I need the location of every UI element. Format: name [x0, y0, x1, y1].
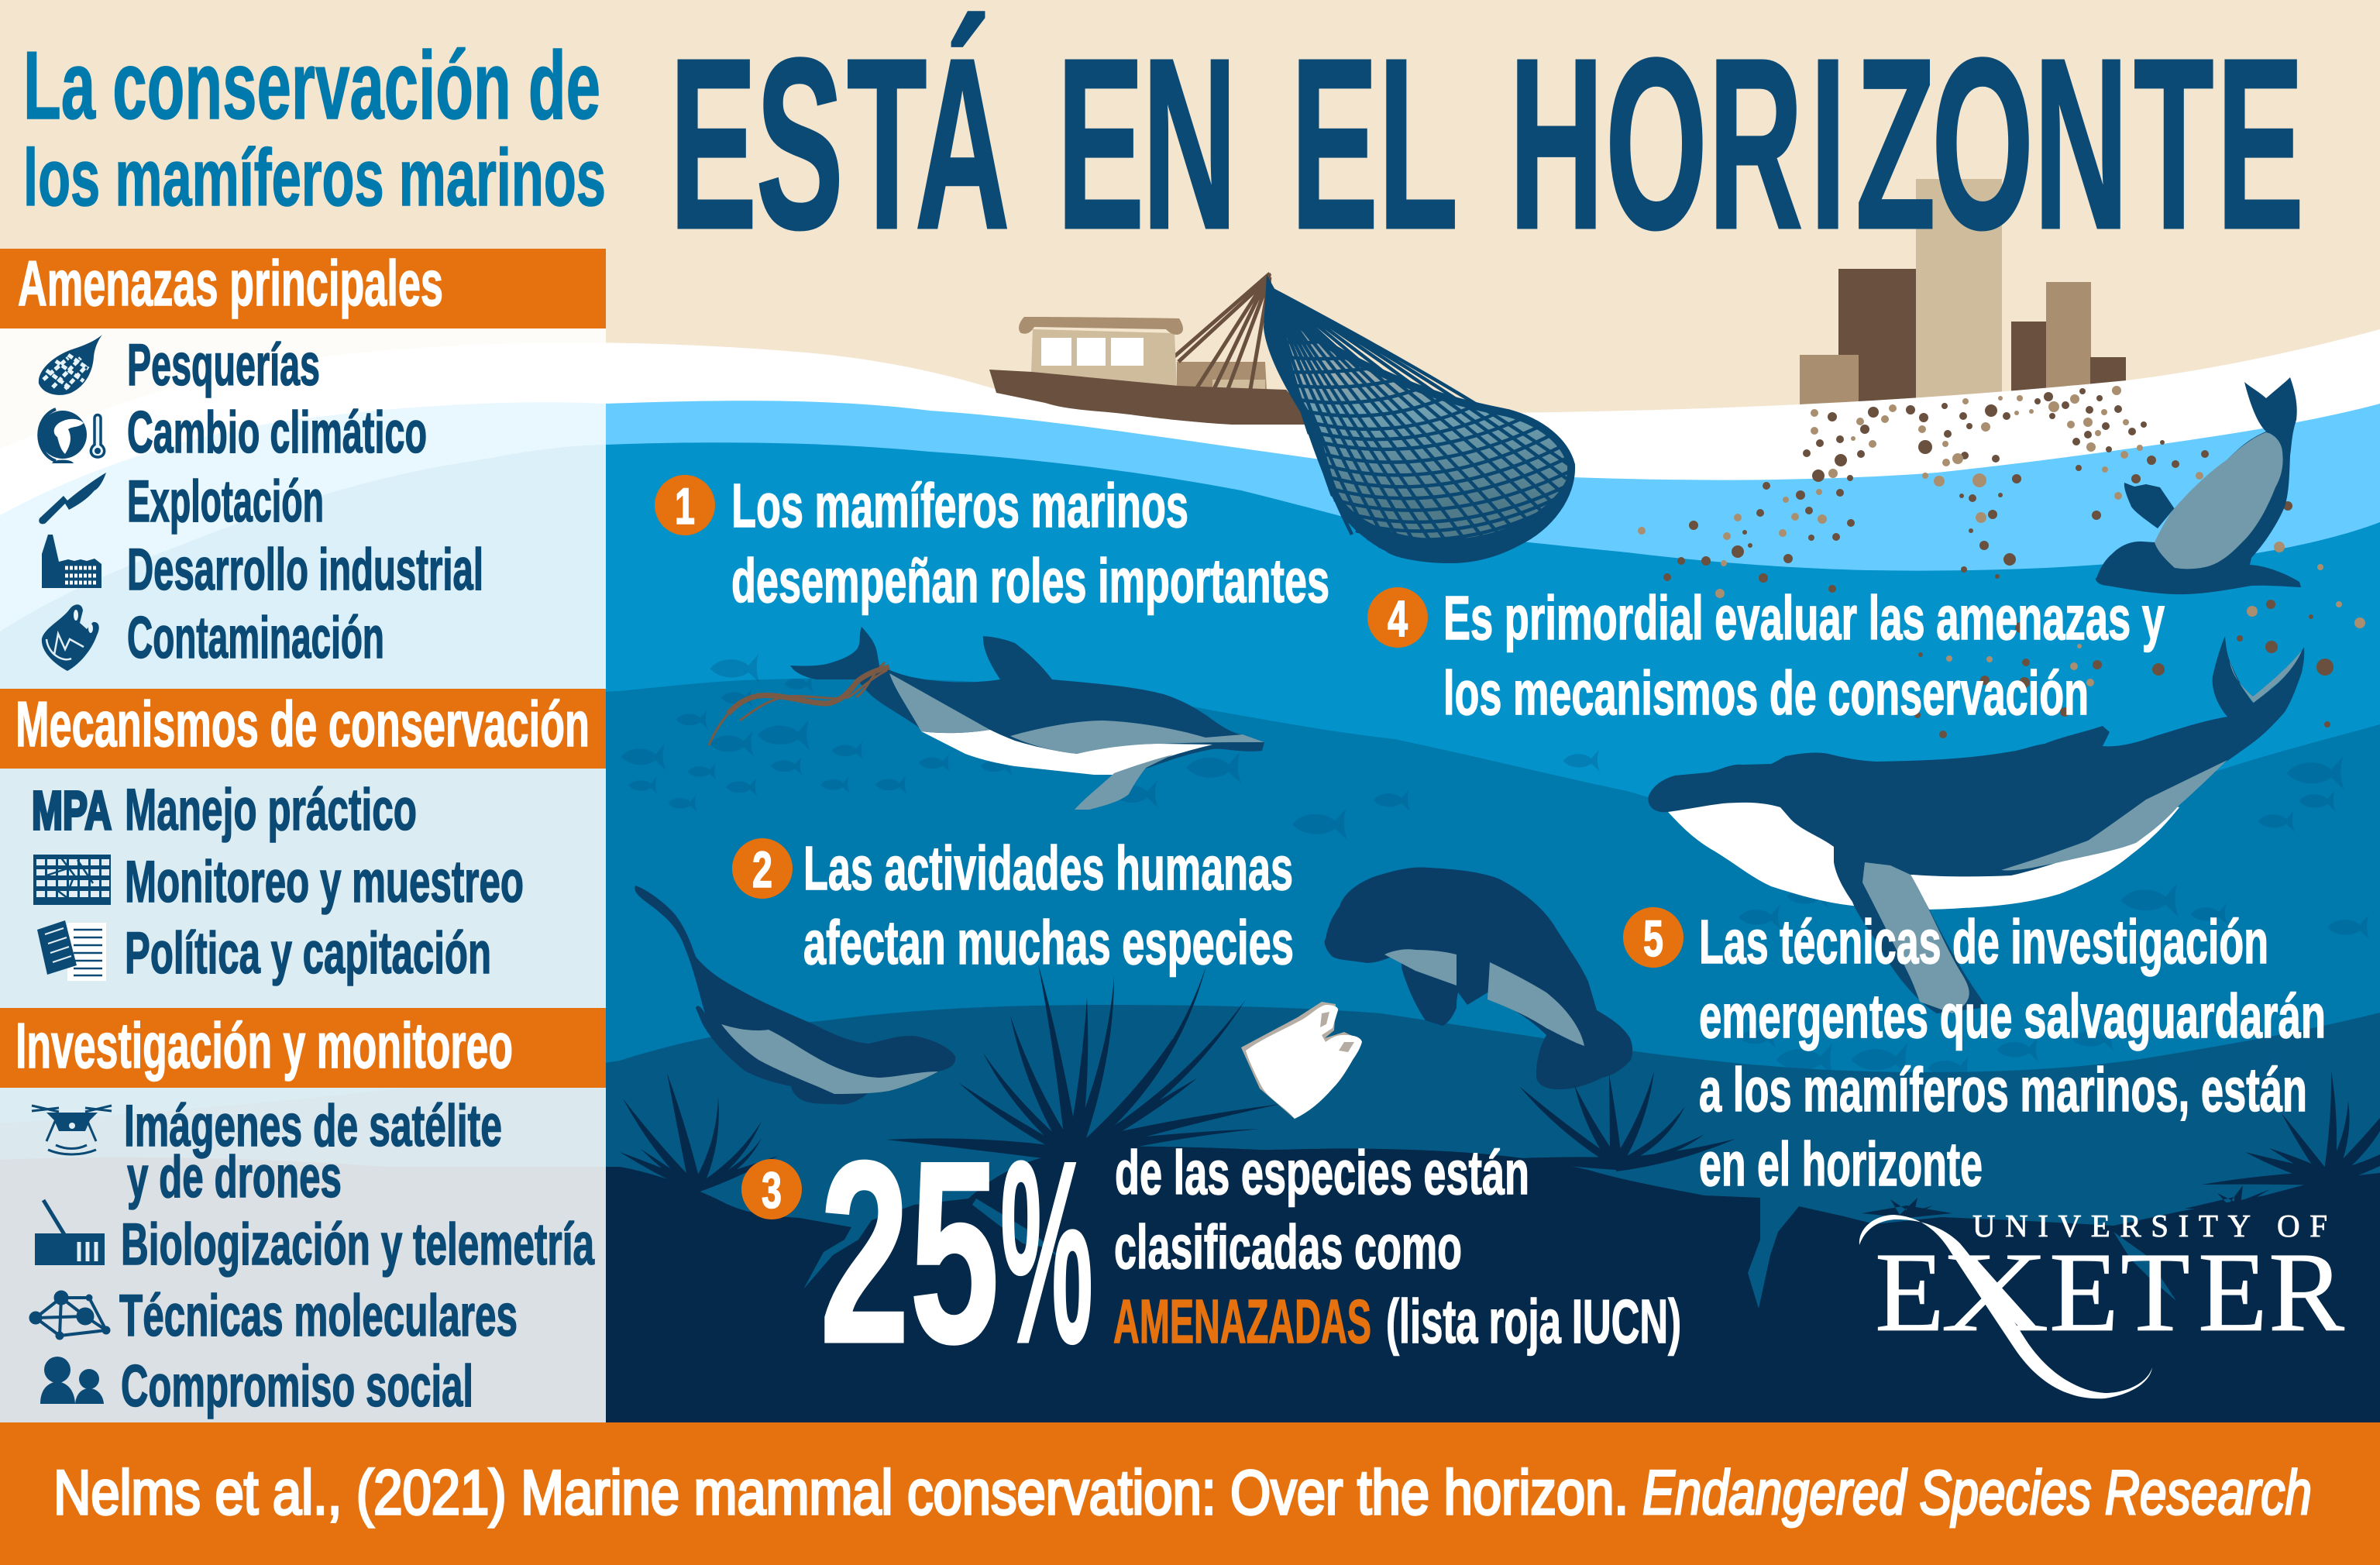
citation text: Nelms et al., (2021) Marine mammal conservation: Over the horizon. — [53, 1458, 1629, 1528]
statistic text: clasificadas como — [1114, 1212, 1462, 1281]
badge 2 — [732, 838, 793, 899]
text 2: afectan muchas especies — [803, 908, 1294, 977]
badge 1: 1 — [675, 477, 695, 535]
heading: research: Investigación y monitoreo — [15, 1010, 513, 1082]
citation bar — [0, 1422, 2380, 1565]
badge 3 — [741, 1159, 802, 1219]
list item: policy and training: Política y capitación — [125, 920, 491, 986]
University of Exeter logo: X — [1941, 1229, 2049, 1355]
big number: 25 — [820, 1107, 999, 1397]
main title: ESTÁ EN EL HORIZONTE — [669, 9, 2304, 280]
heading bar: threats — [0, 249, 606, 328]
badge 5: 5 — [1643, 910, 1663, 967]
badge 4 — [1367, 587, 1428, 648]
point 3: statistic — [741, 1107, 1681, 1397]
list item: exploitation: Explotación — [127, 469, 324, 535]
text 2: Las actividades humanas — [803, 834, 1293, 903]
seagrass plants — [620, 964, 2380, 1218]
seal — [2096, 377, 2301, 594]
subtitle heading: los mamíferos marinos — [23, 133, 606, 223]
sediment runoff: tan particles — [1638, 386, 2365, 686]
University of Exeter logo — [1859, 1208, 2344, 1398]
icon: factory — [42, 535, 101, 588]
panel: principal threats — [0, 247, 606, 671]
sea lion — [635, 886, 955, 1105]
point 5 — [1623, 907, 2326, 1199]
University of Exeter logo: ETER — [2049, 1229, 2344, 1355]
text 1: desempeñan roles importantes — [731, 546, 1329, 615]
statistic text — [1113, 1138, 1681, 1356]
heading bar: research — [0, 1008, 606, 1088]
badge 1 — [655, 475, 715, 535]
icon: globe and thermometer — [39, 409, 105, 463]
icon: knife — [39, 473, 106, 524]
plastic bag — [1241, 1002, 1362, 1119]
fishing net — [1267, 288, 1571, 559]
University of Exeter logo: E — [1875, 1229, 1945, 1355]
icon: MPA: MPA — [32, 780, 112, 841]
text 1 — [731, 471, 1329, 615]
icon: drone — [32, 1106, 112, 1154]
panel: conservation mechanisms — [0, 688, 606, 986]
point 3: statistic: % — [1000, 1107, 1093, 1397]
list item: biologging and telemetry: Biologización y telemetría — [121, 1212, 594, 1278]
heading bar: mechanisms — [0, 689, 606, 769]
sediment runoff: dark particles — [1663, 388, 2334, 738]
text 1: Los mamíferos marinos — [731, 471, 1188, 540]
icon: molecule — [29, 1291, 110, 1340]
panel: research and monitoring — [0, 1008, 606, 1419]
text 5 — [1699, 907, 2326, 1199]
icon: sampling grid — [33, 855, 111, 905]
list item: fisheries: Pesquerías — [127, 332, 320, 398]
sidebar translucent panel — [0, 328, 606, 1422]
list item: industrial development: Desarrollo industrial — [127, 537, 483, 603]
icon: telemetry tag — [35, 1200, 105, 1265]
city skyline — [1800, 179, 2126, 417]
text 2 — [803, 834, 1294, 977]
badge 3: 3 — [762, 1161, 782, 1219]
icon: policy documents — [37, 920, 106, 981]
heading: threats: Amenazas principales — [18, 247, 443, 319]
list item: monitoring and sampling: Monitoreo y muestreo — [125, 849, 524, 915]
icon: plastic bag — [42, 604, 99, 671]
point 2 — [732, 834, 1294, 977]
sea: layered wave bands — [0, 329, 2380, 1565]
subtitle heading: La conservación de — [23, 33, 600, 139]
University of Exeter logo: UNIVERSITY OF — [1972, 1208, 2327, 1243]
humpback whale — [1648, 636, 2304, 1013]
badge 2: 2 — [752, 841, 772, 898]
icon: people — [40, 1357, 104, 1404]
statistic text: AMENAZADAS — [1113, 1287, 1371, 1356]
point 1 — [655, 471, 1329, 615]
fish school silhouettes — [621, 654, 2370, 1085]
list item: climate change: Cambio climático — [127, 400, 427, 466]
point 4 — [1367, 583, 2165, 727]
statistic text: (lista roja IUCN) — [1386, 1287, 1681, 1356]
list item: social engagement: Compromiso social — [121, 1353, 473, 1419]
badge 5 — [1623, 907, 1684, 968]
statistic text: de las especies están — [1115, 1138, 1529, 1207]
text 4 — [1443, 583, 2165, 727]
badge 4: 4 — [1388, 590, 1408, 647]
heading: mechanisms: Mecanismos de conservación — [15, 688, 590, 760]
seabed — [0, 1148, 2380, 1565]
manatee — [1325, 867, 1632, 1089]
icon: net — [39, 335, 102, 395]
list item continuation: y de drones — [127, 1144, 342, 1210]
list item: molecular techniques: Técnicas moleculares — [119, 1283, 518, 1349]
dolphin with entangled rope — [709, 627, 1264, 810]
list item: hands-on management: Manejo práctico — [125, 777, 417, 843]
list item: satellite and drones: Imágenes de satélite — [124, 1093, 502, 1159]
fishing boat — [989, 273, 1317, 425]
seabed cracks — [972, 1199, 2176, 1301]
text 5: en el horizonte — [1699, 1130, 1983, 1199]
list item: pollution: Contaminación — [127, 605, 384, 671]
subtitle heading — [23, 33, 606, 223]
